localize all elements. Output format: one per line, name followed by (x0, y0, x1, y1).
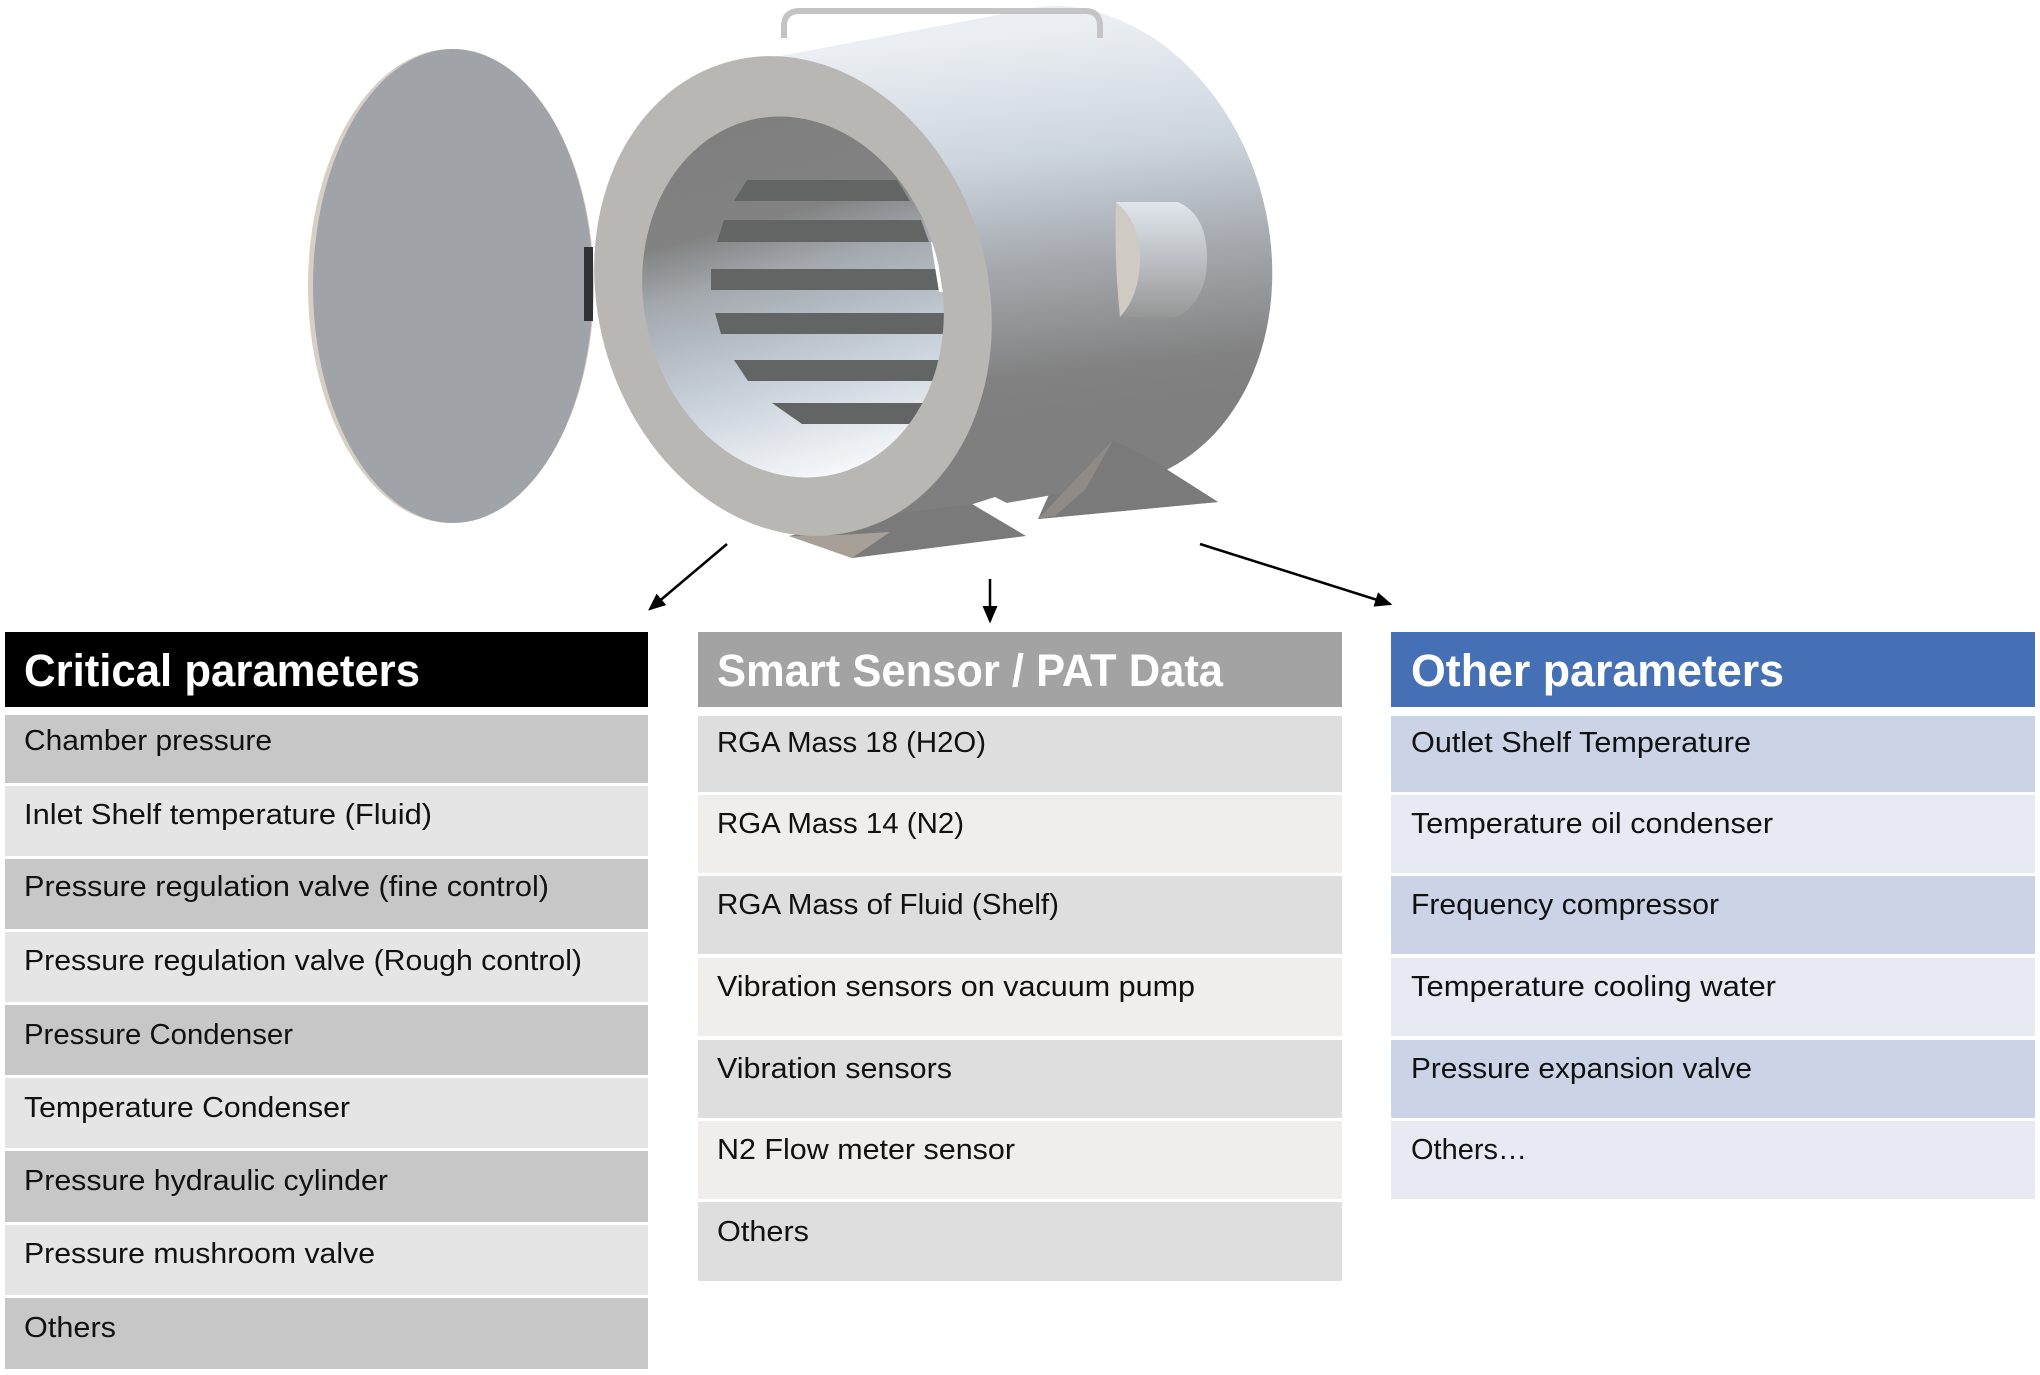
row: pressure condenser (5, 1005, 648, 1075)
front ring (540, 10, 1046, 582)
side port (1116, 202, 1207, 317)
panel: other parameters (1391, 632, 2035, 1199)
row: pressure expansion valve (1391, 1040, 2035, 1118)
row: pressure regulation valve fine (5, 859, 648, 929)
row: pressure expansion valve: Pressure expansion valve (1411, 1053, 1752, 1085)
row: RGA mass of fluid (698, 876, 1342, 954)
heading: smart sensor (698, 632, 1342, 707)
row: chamber pressure: Chamber pressure (24, 725, 272, 757)
row: others (1391, 1121, 2035, 1199)
row: RGA mass 14 (698, 795, 1342, 873)
gap between feet (970, 497, 1040, 536)
arrow: to other parameters (1200, 544, 1390, 604)
row: temperature cooling water: Temperature cooling water (1411, 971, 1776, 1003)
row: pressure hydraulic cylinder: Pressure hydraulic cylinder (24, 1165, 388, 1197)
row: temperature oil condenser: Temperature oil condenser (1411, 808, 1773, 840)
row: pressure condenser: Pressure Condenser (24, 1019, 293, 1051)
row: N2 flow meter sensor (698, 1121, 1342, 1199)
row: temperature oil condenser (1391, 795, 2035, 873)
row: vibration sensors (698, 1040, 1342, 1118)
heading: other parameters (1391, 632, 2035, 707)
row: N2 flow meter sensor: N2 Flow meter sensor (717, 1134, 1015, 1166)
chamber opening (607, 86, 979, 508)
top handle (784, 11, 1100, 38)
row: pressure hydraulic cylinder (5, 1151, 648, 1222)
row: RGA mass 14: RGA Mass 14 (N2) (717, 808, 964, 840)
arrow: to smart sensor data (989, 579, 991, 621)
freeze dryer illustration (308, 6, 1272, 582)
heading: other parameters: Other parameters (1411, 645, 1784, 696)
rear foot (1038, 440, 1218, 519)
row: RGA mass 18 (698, 716, 1342, 792)
panel: critical parameters (5, 632, 648, 1369)
row: pressure regulation valve rough: Pressure regulation valve (Rough control) (24, 945, 582, 977)
row: others (698, 1202, 1342, 1281)
row: others (5, 1298, 648, 1369)
rear foot front face (1038, 440, 1218, 519)
row: pressure regulation valve fine: Pressure regulation valve (fine control) (24, 871, 549, 903)
row: others: Others (24, 1312, 116, 1344)
chamber body (780, 6, 1272, 525)
panel: smart sensor / PAT data (698, 632, 1342, 1281)
heading: smart sensor: Smart Sensor / PAT Data (717, 645, 1224, 696)
shelves (711, 180, 960, 424)
front foot (789, 504, 1026, 558)
arrow: to critical parameters (650, 544, 727, 609)
row: inlet shelf temperature (5, 786, 648, 856)
row: temperature condenser (5, 1078, 648, 1148)
row: outlet shelf temperature: Outlet Shelf Temperature (1411, 727, 1751, 759)
row: RGA mass of fluid: RGA Mass of Fluid (Shelf) (717, 889, 1059, 921)
row: outlet shelf temperature (1391, 716, 2035, 792)
row: pressure mushroom valve (5, 1225, 648, 1295)
row: temperature condenser: Temperature Condenser (24, 1092, 350, 1124)
row: vibration sensors: Vibration sensors (717, 1053, 952, 1085)
heading: critical parameters (5, 632, 648, 707)
row: RGA mass 18: RGA Mass 18 (H2O) (717, 727, 986, 759)
row: pressure regulation valve rough (5, 932, 648, 1002)
row: frequency compressor: Frequency compressor (1411, 889, 1719, 921)
heading: critical parameters: Critical parameters (24, 645, 420, 696)
row: vibration sensors on vacuum pump: Vibration sensors on vacuum pump (717, 971, 1195, 1003)
hinge (584, 247, 593, 321)
row: others: Others (717, 1216, 809, 1248)
row: inlet shelf temperature: Inlet Shelf temperature (Fluid) (24, 799, 432, 831)
row: chamber pressure (5, 715, 648, 783)
row: temperature cooling water (1391, 958, 2035, 1036)
row: vibration sensors on vacuum pump (698, 958, 1342, 1036)
row: pressure mushroom valve: Pressure mushroom valve (24, 1238, 375, 1270)
row: others: Others… (1411, 1134, 1527, 1166)
door (308, 49, 594, 523)
row: frequency compressor (1391, 876, 2035, 954)
